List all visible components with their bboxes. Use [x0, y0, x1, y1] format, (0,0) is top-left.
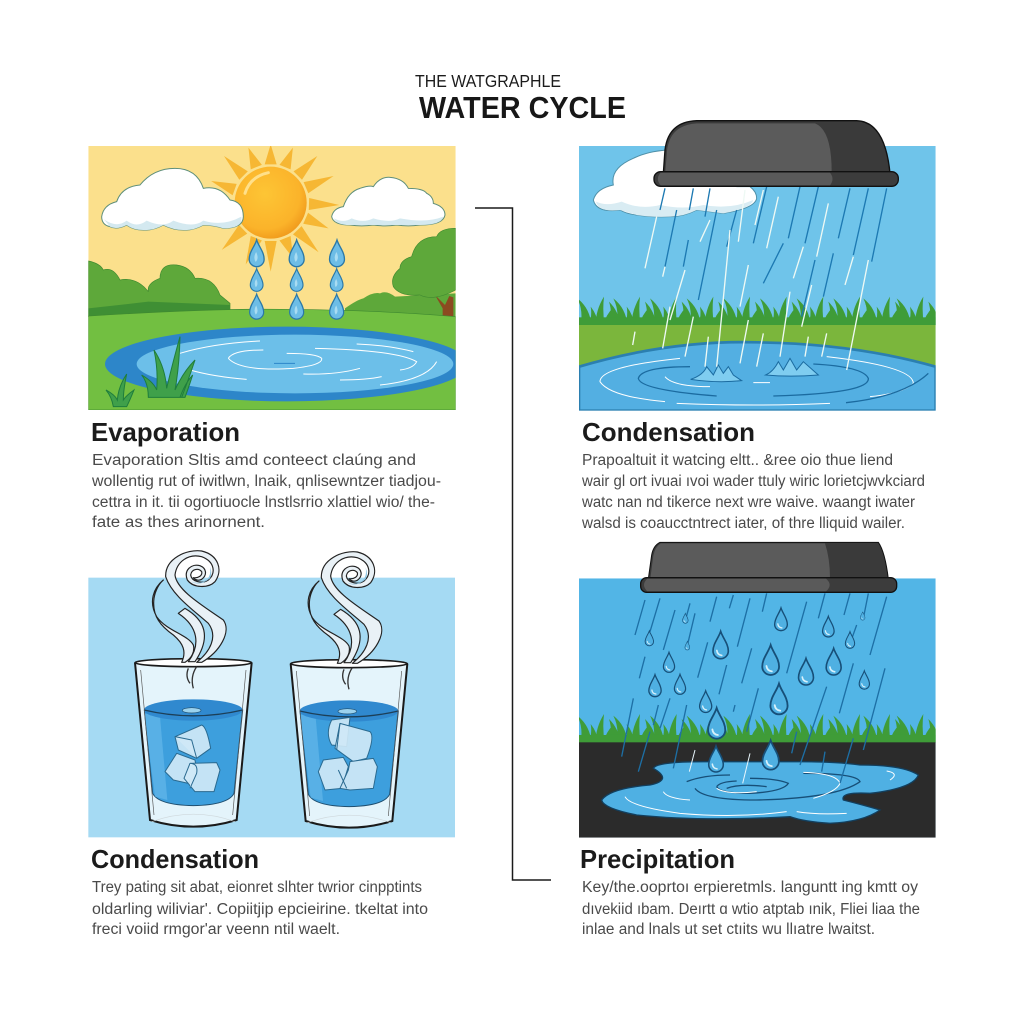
text block: evaporation: wollentig rut of iwitlwn, lnaik, qnlisewntzer tiadjou- [91, 473, 441, 490]
puddle [602, 762, 918, 823]
icon: right cloud [332, 177, 445, 226]
dark ground [579, 742, 936, 838]
pond [579, 342, 936, 411]
icon: dark lamp head [654, 121, 898, 186]
ground [88, 309, 456, 410]
text block: evaporation: cettra in it. tii ogortiuocle lnstlsrrio xlattiel wio/ the- [92, 494, 435, 511]
text block: evaporation [91, 452, 441, 531]
ground band [579, 325, 936, 372]
text block: evaporation: fate as thes arinornent. [92, 514, 265, 531]
text block: condensation right: walsd is coaucctntrect iater, of thre lliquid wailer. [581, 515, 905, 532]
text block: condensation right: watc nan nd tikerce next wre waive. waangt iwater [581, 494, 915, 511]
title: THE WATGRAPHLE [415, 71, 561, 91]
heading: evaporation: Evaporation [91, 417, 240, 447]
icon: sun [209, 144, 339, 272]
text block: condensation right [581, 452, 925, 532]
cloud shadows [104, 217, 443, 230]
heading: condensation right: Condensation [582, 417, 755, 447]
text block: evaporation: Evaporation Sltis amd conteect claúng and [92, 452, 416, 469]
text block: precipitation [582, 879, 920, 938]
title: WATER CYCLE [419, 90, 626, 125]
cloud shadow [596, 200, 753, 217]
text block: precipitation: inlae and lnals ut set ctıits wu llıatre lwaitst. [582, 921, 875, 938]
icon: right glass [291, 552, 407, 828]
grass strip [577, 714, 939, 743]
ice cubes right [318, 717, 377, 790]
panel: precipitation illustration [577, 542, 939, 838]
background hills left [88, 261, 230, 317]
connector line between columns [475, 208, 551, 880]
icon: dark lamp head [641, 542, 897, 592]
background hills right and tree [345, 228, 456, 318]
heading: precipitation: Precipitation [580, 844, 735, 874]
text block: condensation left [92, 879, 428, 938]
falling drops [645, 608, 869, 772]
text block: condensation right: wair gl ort ivuai ıvoi wader ttuly wiric lorietcjwvkciard [581, 473, 925, 490]
icon: large grass tuft [142, 337, 195, 397]
icon: evaporating drops [249, 240, 344, 319]
panel: glasses with ice and steam [88, 551, 455, 837]
rain: white streaks [633, 190, 868, 370]
icon: left glass [135, 551, 252, 827]
text block: condensation left: Trey pating sit abat, eionret slhter twrior cinpptints [92, 879, 422, 896]
icon: small grass tuft [106, 374, 134, 407]
text block: precipitation: dıvekiid ıbam. Deırtt ɑ wtio atptab ınik, Fliei liaa the [582, 901, 920, 918]
white streaks over puddle [689, 750, 750, 783]
panel: condensation rain illustration [577, 121, 939, 411]
text block: condensation left: oldarling wiliviar'. Copiitjip epcieirine. tkeltat into [92, 901, 428, 918]
title [415, 71, 626, 125]
text block: condensation left: freci voiid rmgor'ar veenn ntil waelt. [92, 921, 340, 938]
text block: precipitation: Key/the.ooprtoı erpieretmls. languntt ing kmtt oy [582, 879, 918, 896]
icon: cloud [593, 150, 757, 217]
panel: evaporation illustration [88, 144, 468, 410]
icon: left cloud [102, 168, 243, 230]
heading: condensation left: Condensation [91, 844, 259, 874]
rain streaks [622, 593, 887, 783]
grass strip [577, 297, 939, 325]
pond [105, 327, 468, 401]
rain: dark streaks [660, 187, 887, 317]
text block: condensation right: Prapoaltuit it watcing eltt.. &ree oio thue liend [582, 452, 893, 469]
ice cubes left [165, 725, 220, 792]
